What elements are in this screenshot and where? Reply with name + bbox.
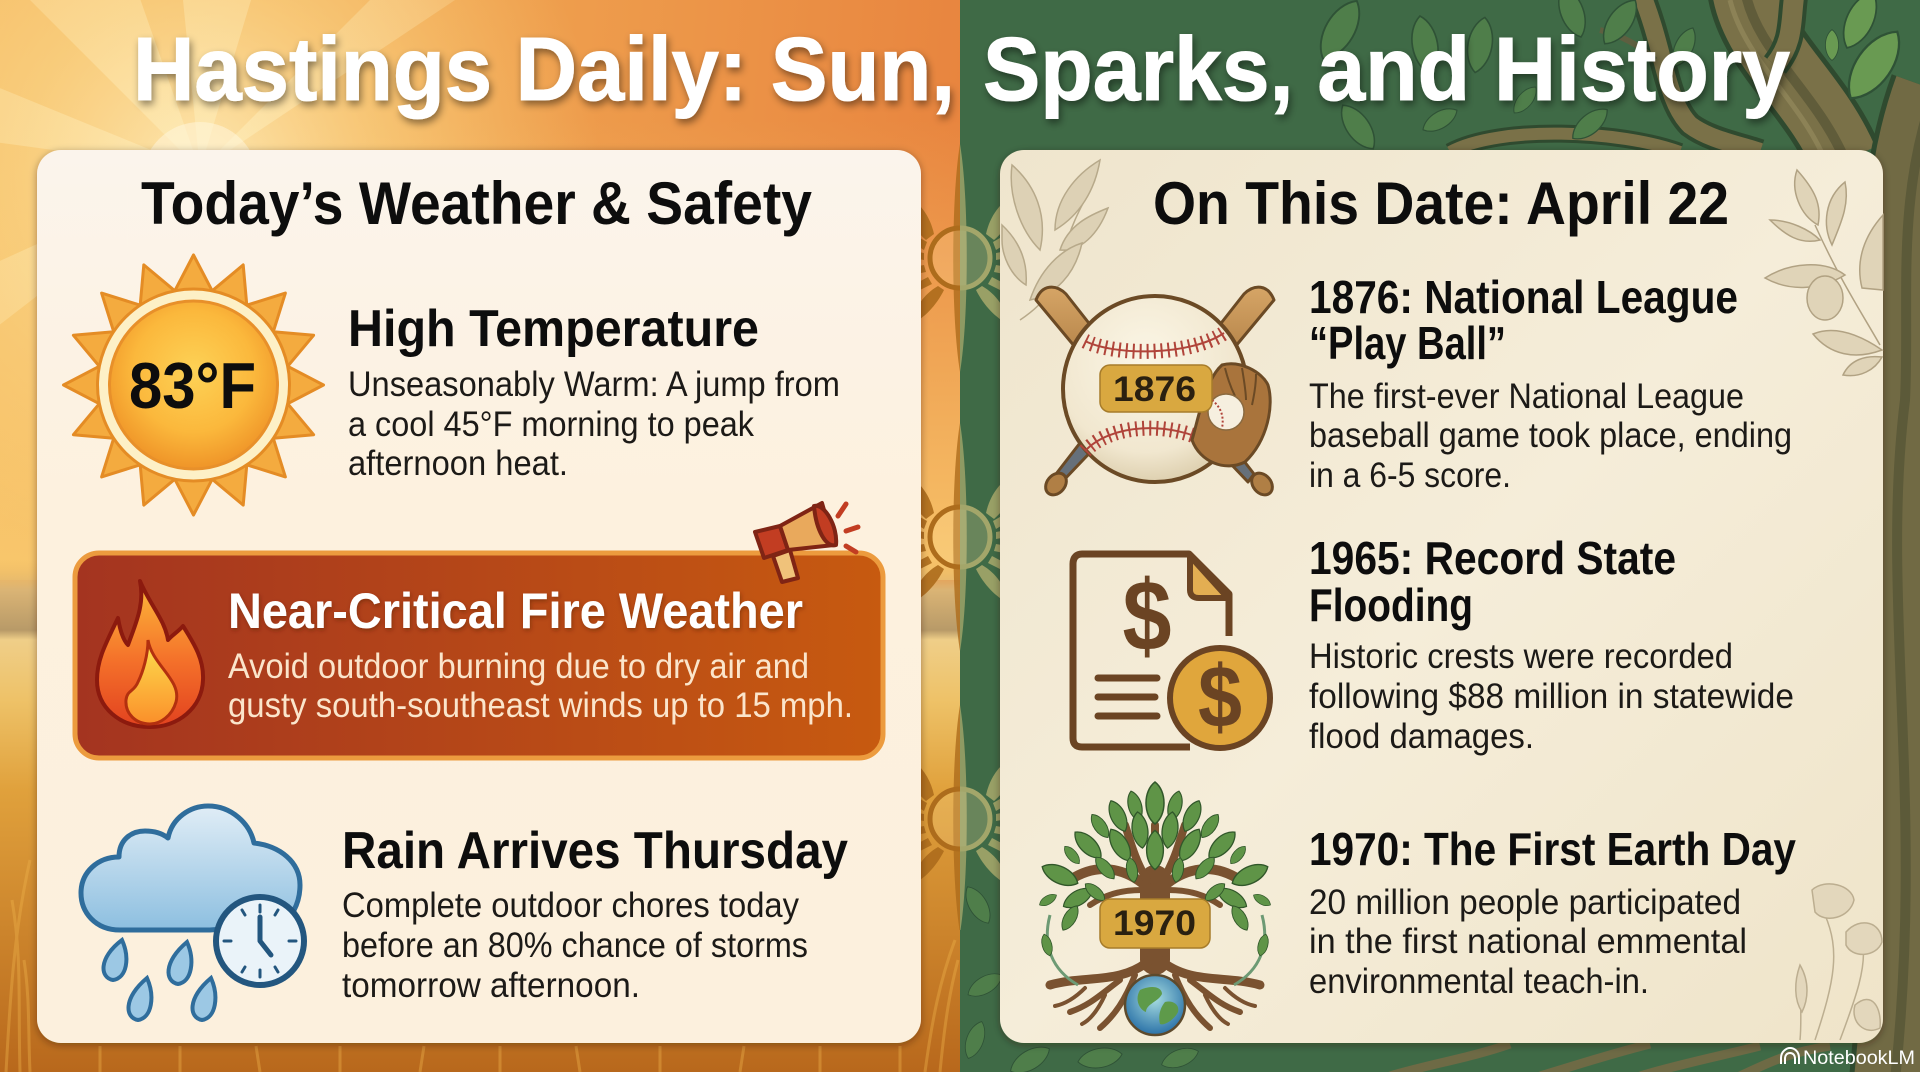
icon: sun with temperature	[64, 255, 324, 515]
badge: 1970	[1100, 899, 1210, 948]
text block: high temperature: Unseasonably Warm: A jump from	[348, 365, 840, 404]
icon: flame	[97, 581, 203, 727]
botanical sprig: top right	[1765, 170, 1883, 376]
panel: today's weather and safety	[37, 150, 921, 1043]
sun ornaments along the centre seam	[896, 144, 1024, 933]
text block: fire warning	[228, 583, 853, 725]
text block: 1876: baseball game took place, ending	[1309, 416, 1792, 455]
text block: 1876: 1876: National League	[1309, 271, 1738, 323]
text block: high temperature: afternoon heat.	[348, 444, 568, 483]
text block: high temperature: a cool 45°F morning to peak	[348, 405, 754, 444]
text block: 1970: 1970: The First Earth Day	[1309, 823, 1796, 875]
icon: document with dollar and coin: $	[1122, 560, 1172, 672]
text block: 1970: in the first national emmental	[1309, 922, 1747, 961]
watermark: NotebookLM: NotebookLM	[1803, 1048, 1915, 1069]
icon: baseball 1876 with bats and glove	[1036, 287, 1277, 499]
icon: globe	[1125, 975, 1185, 1035]
botanical flowers: bottom right	[1796, 884, 1882, 1040]
text block: 1965: flood damages.	[1309, 717, 1534, 756]
text block: rain arrives: Complete outdoor chores today	[342, 886, 799, 925]
icon: tree and globe 1970	[1037, 782, 1273, 1035]
text block: 1876: “Play Ball”	[1309, 317, 1506, 369]
text block: 1965: Flooding	[1309, 579, 1473, 631]
botanical sprig: top left	[1002, 160, 1108, 320]
trunk and branches	[1450, 0, 1920, 1072]
icon: document with dollar and coin: $	[1198, 647, 1242, 746]
text block: 1970: environmental teach-in.	[1309, 962, 1649, 1001]
leaves on green	[1311, 0, 1701, 155]
icon: sun with temperature: 83°F	[129, 349, 256, 422]
text block: 1965: following $88 million in statewide	[1309, 677, 1794, 716]
text block: 1876: in a 6-5 score.	[1309, 456, 1511, 495]
title: Sparks, and History	[983, 20, 1790, 120]
icon: megaphone	[755, 503, 858, 582]
icon: glove	[1192, 364, 1270, 466]
text block: 1970	[1309, 823, 1796, 1001]
icon: document with dollar and coin	[1073, 554, 1270, 748]
panel: on this date	[1000, 150, 1883, 1043]
text block: fire warning: Near-Critical Fire Weather	[228, 583, 803, 639]
callout: near-critical fire weather	[75, 553, 883, 758]
badge: 1876: 1876	[1113, 370, 1196, 409]
title	[133, 20, 1790, 120]
background: warm orange half with sun rays and wheat field	[0, 0, 960, 1072]
text block: rain arrives: tomorrow afternoon.	[342, 966, 640, 1005]
text block: high temperature: High Temperature	[348, 300, 759, 358]
title: Hastings Daily: Sun,	[133, 20, 955, 120]
icon: rain cloud with clock	[81, 806, 304, 1020]
text block: 1876: The first-ever National League	[1309, 377, 1744, 416]
text block: rain arrives: before an 80% chance of storms	[342, 926, 808, 965]
text block: fire warning: Avoid outdoor burning due to dry air and	[228, 647, 809, 686]
text block: 1965	[1309, 532, 1794, 756]
text block: 1965: Historic crests were recorded	[1309, 637, 1733, 676]
text block: rain arrives: Rain Arrives Thursday	[342, 822, 848, 880]
text block: high temperature	[348, 300, 840, 483]
heading: weather: Today’s Weather & Safety	[141, 170, 813, 237]
badge: 1876	[1100, 365, 1212, 412]
heading: history: On This Date: April 22	[1153, 170, 1729, 237]
text block: fire warning: gusty south-southeast winds up to 15 mph.	[228, 686, 853, 725]
text block: rain arrives	[342, 822, 848, 1005]
background: forest green half with tree	[960, 0, 1920, 1072]
text block: 1876	[1309, 271, 1792, 495]
badge: 1970: 1970	[1113, 904, 1196, 943]
roots and foliage below panel	[1390, 1044, 1830, 1072]
text block: 1970: 20 million people participated	[1309, 883, 1741, 922]
text block: 1965: 1965: Record State	[1309, 532, 1676, 584]
